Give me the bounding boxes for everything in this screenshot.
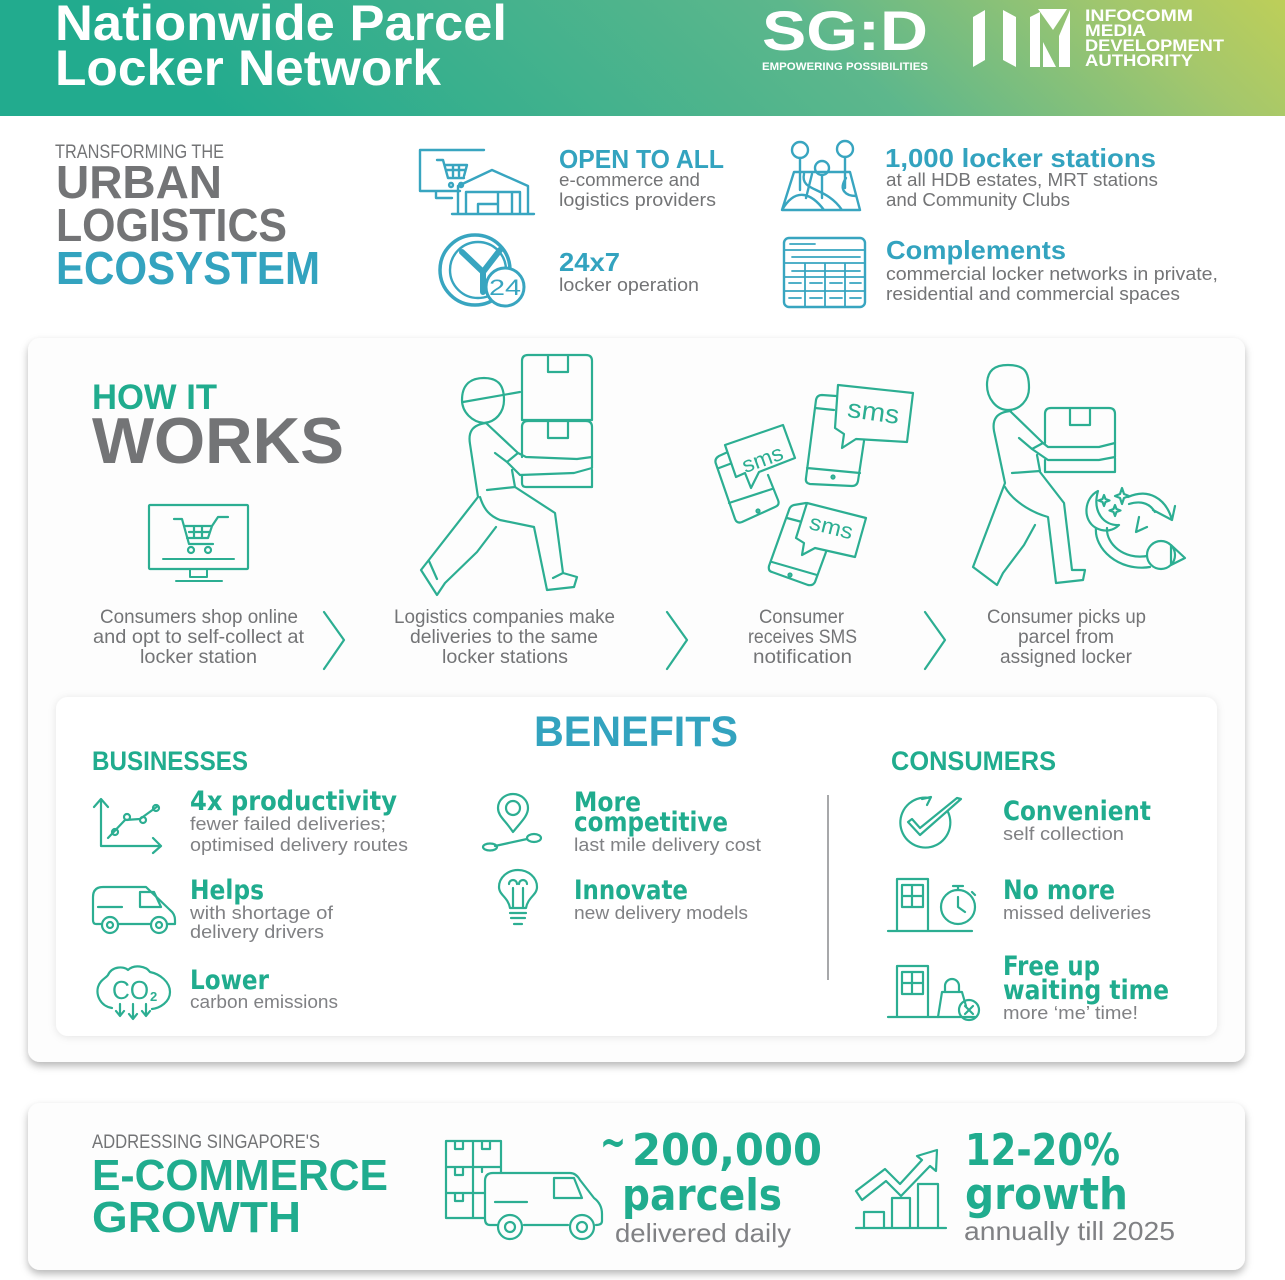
step 4: pick up (973, 365, 1185, 668)
benefit: 4x productivity: fewer failed deliveries; (190, 813, 386, 834)
heading: benefits: BENEFITS (534, 708, 738, 756)
feature: open to all: OPEN TO ALL (559, 144, 724, 174)
benefit: helps: Helps (190, 875, 264, 906)
benefit: helps: delivery drivers (190, 921, 324, 942)
icon: CO2 cloud: 2 (150, 989, 157, 1004)
step 1: shop online (93, 505, 305, 668)
icon: 24 hour clock (440, 235, 524, 306)
feature: complements: commercial locker networks in private, (886, 263, 1218, 284)
icon: door and stopwatch (888, 879, 975, 931)
benefit: lower: Lower (190, 965, 270, 996)
icon: courier carrying boxes (421, 355, 592, 595)
heading: consumers: CONSUMERS (891, 746, 1056, 776)
arrow (667, 612, 687, 669)
step 2: delivery (394, 355, 615, 668)
logo: SG:D: SG:D (762, 0, 928, 62)
step 3: sms notification: receives SMS (748, 626, 857, 648)
feature: 1,000 locker stations (782, 141, 1158, 210)
step 4: pick up: Consumer picks up (987, 606, 1146, 628)
benefit: more competitive: competitive (574, 807, 728, 838)
feature: 24x7 (440, 235, 699, 306)
panel: benefits (56, 697, 1217, 1036)
heading: e-commerce growth: GROWTH (92, 1193, 301, 1242)
icon: door and bag (888, 966, 979, 1020)
benefit: free up waiting time: waiting time (1003, 975, 1169, 1006)
stat: 200,000 parcels: 200,000 (632, 1125, 822, 1176)
benefit: more competitive (483, 787, 761, 855)
title (55, 0, 507, 96)
feature: 24x7: locker operation (559, 274, 699, 295)
benefit: convenient (900, 796, 1151, 848)
benefit: no more: No more (1003, 875, 1115, 906)
icon: 24 hour clock: 24 (489, 275, 521, 300)
feature: complements: residential and commercial spaces (886, 283, 1180, 304)
stat: 200,000 parcels (446, 1117, 822, 1248)
benefit: free up waiting time: more ‘me’ time! (1003, 1002, 1138, 1023)
logo: IMDA: INFOCOMM (1085, 7, 1193, 25)
heading: transforming the urban logistics ecosystem: URBAN (56, 156, 222, 208)
stat: 12-20% growth: 12-20% (965, 1125, 1120, 1176)
step 3: sms notification (715, 385, 913, 668)
heading: e-commerce growth: E-COMMERCE (92, 1151, 388, 1200)
step 2: delivery: Logistics companies make (394, 606, 615, 628)
feature: 24x7: 24x7 (559, 247, 620, 277)
icon: van with parcels (446, 1141, 602, 1239)
benefit: innovate: new delivery models (574, 902, 748, 923)
icon: map with pins (782, 141, 860, 210)
feature: complements: Complements (886, 235, 1066, 265)
benefit: 4x productivity (94, 786, 408, 855)
benefit: lower (98, 965, 338, 1019)
step 1: shop online: Consumers shop online (100, 606, 298, 628)
benefit: lower: carbon emissions (190, 991, 338, 1012)
feature: 1,000 locker stations: and Community Clubs (886, 189, 1070, 210)
heading: transforming the urban logistics ecosystem (55, 142, 320, 294)
benefit: helps: with shortage of (189, 902, 334, 923)
benefit: 4x productivity: optimised delivery routes (190, 834, 408, 855)
icon: light bulb (499, 870, 537, 924)
step 3: sms notification: notification (753, 646, 852, 668)
step 2: delivery: deliveries to the same (410, 626, 598, 648)
benefit: helps (93, 875, 334, 942)
icon: locker bank (784, 238, 865, 307)
icon: CO2 cloud: CO (112, 975, 149, 1005)
title: Locker Network (55, 40, 441, 96)
step 3: sms notification: Consumer (759, 606, 844, 628)
icon: consumer carrying parcel (973, 365, 1115, 585)
logo: IMDA: AUTHORITY (1085, 52, 1193, 70)
icon: shopping monitor and warehouse (420, 150, 534, 214)
benefit: free up waiting time (888, 951, 1169, 1023)
benefit: convenient: Convenient (1003, 796, 1151, 827)
step 1: shop online: locker station (140, 646, 257, 668)
benefit: convenient: self collection (1003, 823, 1124, 844)
arrow (324, 612, 344, 669)
logo: SG:D: EMPOWERING POSSIBILITIES (762, 61, 928, 73)
heading: e-commerce growth: ADDRESSING SINGAPORE'S (92, 1131, 320, 1153)
step 4: pick up: assigned locker (1000, 646, 1132, 668)
benefit: 4x productivity: 4x productivity (190, 786, 397, 817)
icon: monitor with cart (149, 505, 248, 581)
heading: transforming the urban logistics ecosystem: ECOSYSTEM (56, 242, 320, 294)
icon: CO2 cloud (98, 966, 170, 1019)
icon: phones with sms bubbles: sms (846, 393, 901, 430)
benefit: innovate: Innovate (574, 875, 688, 906)
stat: 12-20% growth: annually till 2025 (964, 1216, 1175, 1246)
icon: map pin route (483, 794, 541, 850)
heading: transforming the urban logistics ecosystem: TRANSFORMING THE (55, 142, 224, 163)
benefit: free up waiting time: Free up (1003, 951, 1100, 982)
heading: businesses: BUSINESSES (92, 746, 248, 776)
feature: open to all (420, 144, 724, 214)
benefit: more competitive: last mile delivery cost (574, 834, 761, 855)
icon: day and night cycle (1086, 488, 1185, 569)
feature: open to all: logistics providers (559, 189, 716, 210)
step 4: pick up: parcel from (1018, 626, 1114, 648)
icon: phones with sms bubbles (715, 385, 913, 585)
stat: 12-20% growth: growth (965, 1169, 1128, 1220)
icon: phones with sms bubbles: sms (738, 440, 786, 478)
heading: transforming the urban logistics ecosystem: LOGISTICS (56, 199, 287, 251)
stat: 200,000 parcels: delivered daily (615, 1218, 791, 1248)
benefit: innovate (499, 870, 748, 924)
logo: IMDA (973, 7, 1224, 70)
stat: 200,000 parcels: parcels (622, 1170, 782, 1221)
benefit: more competitive: More (574, 787, 641, 818)
heading: how it works: WORKS (92, 404, 344, 477)
arrow (925, 612, 945, 669)
panel: e-commerce growth (28, 1103, 1245, 1270)
feature: open to all: e-commerce and (559, 169, 700, 190)
feature: 1,000 locker stations: 1,000 locker stations (885, 143, 1156, 173)
stat: 12-20% growth (856, 1125, 1175, 1246)
benefit: no more (888, 875, 1151, 931)
icon: growth chart (856, 1150, 946, 1228)
feature: 1,000 locker stations: at all HDB estates, MRT stations (886, 169, 1158, 190)
logo: IMDA: DEVELOPMENT (1085, 37, 1224, 55)
heading: e-commerce growth (92, 1131, 388, 1242)
feature: complements (784, 235, 1218, 307)
icon: van (93, 887, 175, 933)
logo: IMDA: MEDIA (1085, 22, 1146, 40)
icon: phones with sms bubbles: sms (807, 509, 856, 544)
step 1: shop online: and opt to self-collect at (93, 626, 305, 648)
heading: how it works: HOW IT (92, 378, 217, 417)
icon: line chart (94, 799, 161, 853)
benefit: no more: missed deliveries (1003, 902, 1151, 923)
panel: how it works (28, 338, 1245, 1062)
icon: check mark circle (900, 797, 961, 848)
step 2: delivery: locker stations (442, 646, 568, 668)
header banner (0, 0, 1285, 116)
stat: 200,000 parcels: ~ (600, 1117, 626, 1168)
